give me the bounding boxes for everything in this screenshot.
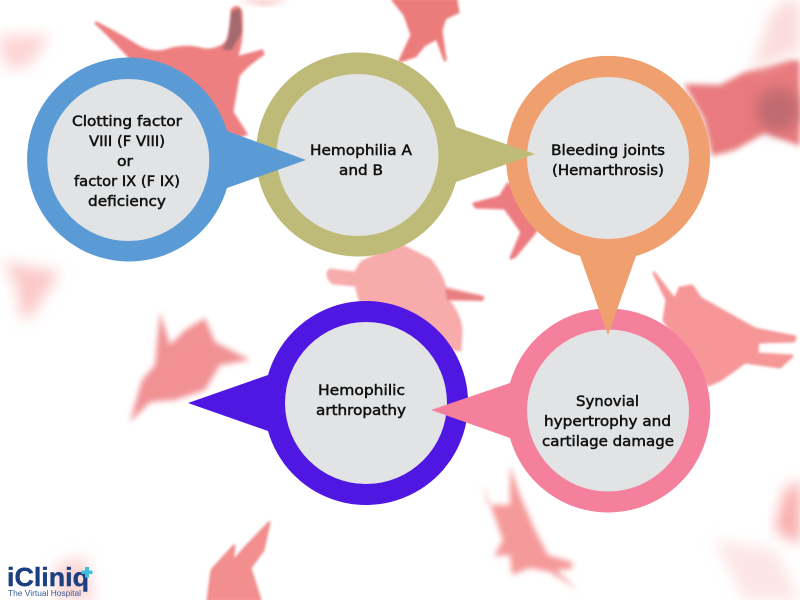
label: and B — [339, 163, 383, 179]
inner disc — [276, 74, 438, 236]
platelet: top right large — [684, 60, 800, 156]
label — [310, 143, 412, 179]
olive speech bubble — [256, 52, 535, 257]
platelet: centre — [328, 245, 484, 350]
platelet: faint bottom right — [775, 480, 800, 545]
inner disc — [285, 322, 447, 484]
logo: iCliniq — [7, 562, 92, 598]
inner disc — [47, 79, 209, 241]
label: hypertrophy and — [544, 414, 671, 430]
platelet: faint top — [235, 0, 290, 6]
platelet: faint bottom right lower — [715, 540, 800, 600]
pink speech bubble — [431, 309, 710, 512]
label: or — [117, 154, 133, 170]
label: Hemophilic — [318, 383, 405, 399]
node 2: Hemophilia A and B — [256, 52, 535, 257]
platelet: bottom centre-left — [208, 523, 269, 600]
purple speech bubble — [188, 301, 468, 505]
orange speech bubble — [506, 56, 710, 335]
label: arthropathy — [316, 403, 406, 419]
logo wordmark: iCliniq — [7, 562, 89, 592]
node 3: Bleeding joints — [506, 56, 710, 335]
platelet: faint top left — [0, 35, 50, 70]
inner disc — [527, 330, 689, 492]
label: Synovial — [576, 394, 639, 410]
logo tagline: The Virtual Hospital — [8, 589, 81, 598]
label: Clotting factor — [72, 114, 182, 130]
node 4: Synovial hypertrophy and cartilage damage — [431, 309, 710, 512]
icon: medical cross — [82, 567, 92, 578]
inner disc — [527, 77, 689, 239]
label — [542, 394, 674, 450]
platelet: faint left — [3, 262, 60, 320]
platelet: top right faint arm — [752, 0, 800, 70]
platelet: behind orange — [474, 184, 540, 258]
blue speech bubble — [27, 57, 306, 261]
platelet: left middle — [130, 312, 250, 422]
label: factor IX (F IX) — [74, 174, 180, 190]
platelet: top centre — [393, 0, 458, 61]
label — [316, 383, 406, 419]
label: Hemophilia A — [310, 143, 412, 159]
label: VIII (F VIII) — [89, 134, 165, 150]
platelet: faint by logo — [55, 555, 95, 600]
label: Bleeding joints — [551, 143, 665, 159]
platelet: bottom right centre — [483, 466, 578, 590]
label: cartilage damage — [542, 434, 674, 450]
platelet: right — [654, 273, 795, 385]
label: (Hemarthrosis) — [552, 163, 664, 179]
label — [551, 143, 665, 179]
label — [72, 114, 182, 210]
label: deficiency — [88, 194, 166, 210]
node 5: Hemophilic arthropathy — [188, 301, 468, 505]
platelet: top left large — [96, 7, 263, 140]
platelet: top right dark patch — [756, 88, 800, 132]
node 1: Clotting factor deficiency — [27, 57, 306, 261]
